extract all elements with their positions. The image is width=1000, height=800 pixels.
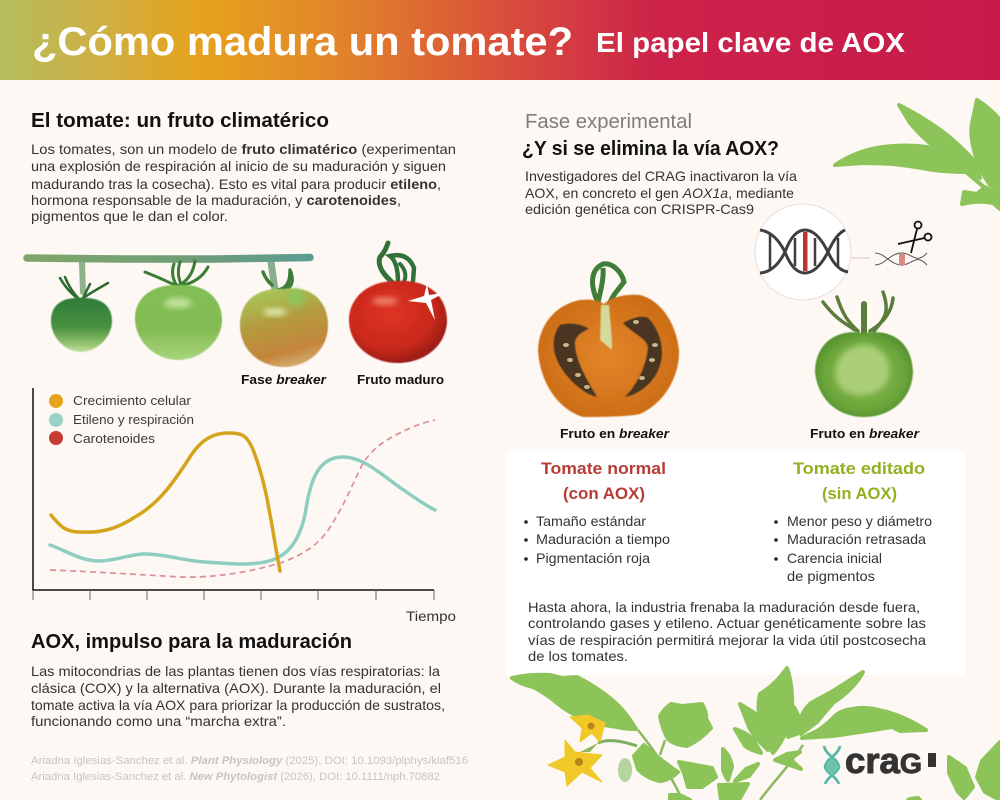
small green tomato bbox=[51, 298, 112, 352]
axes bbox=[33, 388, 434, 590]
cut tomato: normal bbox=[538, 264, 679, 417]
text block: AOX: clásica (COX) y la alternativa (AOX). Durante la maduración, el bbox=[31, 680, 441, 696]
breaker tomato bbox=[240, 288, 328, 367]
caption: edited fruit: Fruto en breaker bbox=[810, 427, 920, 441]
text block: climaterico: una explosión de respiración al inicio de su maduración y siguen bbox=[31, 158, 446, 174]
label: fase experimental: Fase experimental bbox=[525, 111, 692, 133]
subtitle: El papel clave de AOX bbox=[596, 27, 905, 58]
title: normal: (con AOX) bbox=[563, 484, 645, 503]
panel: comparison bbox=[505, 451, 965, 675]
flowers bbox=[548, 715, 605, 786]
list: edited: Maduración retrasada bbox=[787, 531, 926, 547]
stems bbox=[598, 730, 803, 800]
text block: climaterico: hormona responsable de la maduración, y carotenoides, bbox=[31, 192, 401, 208]
stem of ripe tomato bbox=[379, 243, 414, 282]
conclusion: vías de respiración permitirá mejorar la vida útil postcosecha bbox=[528, 632, 926, 648]
legend bbox=[49, 393, 194, 446]
large green tomato bbox=[135, 285, 222, 360]
text block: AOX: Las mitocondrias de las plantas tienen dos vías respiratorias: la bbox=[31, 663, 440, 679]
text block: AOX: funcionando como una “marcha extra”. bbox=[31, 713, 286, 729]
conclusion: de los tomates. bbox=[528, 648, 628, 664]
text block: CRISPR bbox=[525, 168, 797, 217]
logo icon bbox=[824, 746, 840, 784]
text block: CRISPR: AOX, en concreto el gen AOX1a, mediante bbox=[525, 185, 794, 201]
title: normal: Tomate normal bbox=[541, 459, 666, 478]
truss stem bbox=[27, 258, 310, 300]
title: normal bbox=[541, 459, 666, 503]
text block: climaterico: Los tomates, son un modelo de fruto climatérico (experimentan bbox=[31, 141, 456, 157]
list: edited bbox=[774, 513, 932, 584]
list: normal bbox=[524, 513, 670, 566]
series: carotenoides bbox=[50, 420, 435, 577]
line chart bbox=[33, 388, 435, 600]
heading: AOX: AOX, impulso para la maduración bbox=[31, 631, 352, 653]
list: edited: de pigmentos bbox=[787, 568, 875, 584]
caption: fruto maduro: Fruto maduro bbox=[357, 373, 444, 387]
list: normal: Pigmentación roja bbox=[536, 550, 650, 566]
heading: eliminar AOX: ¿Y si se elimina la vía AOX? bbox=[522, 138, 779, 160]
connector line bbox=[851, 257, 870, 259]
text block: climaterico: madurando tras la cosecha). Esto es vital para producir etileno, bbox=[31, 176, 441, 192]
leaves bbox=[512, 668, 1000, 800]
list: edited: Carencia inicial bbox=[787, 550, 882, 566]
title: edited: Tomate editado bbox=[793, 459, 925, 478]
axis label: Tiempo bbox=[406, 608, 456, 624]
conclusion: controlando gases y etileno. Actuar genéticamente sobre las bbox=[528, 615, 926, 631]
text block: climaterico: pigmentos que le dan el color. bbox=[31, 208, 228, 224]
header banner bbox=[0, 0, 1000, 80]
series: crecimiento bbox=[51, 433, 280, 571]
cut tomato: edited bbox=[815, 292, 913, 417]
title: edited bbox=[793, 459, 925, 503]
text block: climaterico bbox=[31, 141, 456, 224]
caption: fase breaker: Fase breaker bbox=[241, 373, 327, 387]
text block: CRISPR: Investigadores del CRAG inactivaron la vía bbox=[525, 168, 797, 184]
references: Ariadna Iglesias-Sanchez et al. New Phytologist (2026), DOI: 10.1111/nph.70882 bbox=[31, 771, 440, 783]
main title: ¿Cómo madura un tomate? bbox=[32, 20, 573, 64]
text block: CRISPR: edición genética con CRISPR-Cas9 bbox=[525, 201, 754, 217]
logo: CRAG bbox=[824, 740, 936, 784]
bud bbox=[618, 758, 632, 782]
icon: scissors and small DNA bbox=[875, 222, 932, 265]
title: edited: (sin AOX) bbox=[822, 484, 897, 503]
text block: AOX bbox=[31, 663, 445, 729]
list: normal: Tamaño estándar bbox=[536, 513, 646, 529]
ripe red tomato bbox=[349, 281, 447, 363]
caption: normal fruit: Fruto en breaker bbox=[560, 427, 670, 441]
references bbox=[31, 755, 468, 783]
icon: DNA magnified bbox=[755, 204, 851, 300]
heading: fruto climaterico: El tomate: un fruto climatérico bbox=[31, 110, 329, 132]
icon: top right leaves bbox=[835, 100, 1000, 209]
tomato truss with ripening stages bbox=[27, 243, 447, 367]
logo: CRAG: craG bbox=[845, 740, 922, 781]
legend: Carotenoides bbox=[73, 431, 156, 446]
text block: AOX: tomate activa la vía AOX para priorizar la producción de sustratos, bbox=[31, 697, 445, 713]
conclusion: Hasta ahora, la industria frenaba la maduración desde fuera, bbox=[528, 599, 920, 615]
series: etileno bbox=[50, 457, 435, 564]
sparkle bbox=[408, 284, 444, 320]
legend: Crecimiento celular bbox=[73, 393, 192, 408]
references: Ariadna Iglesias-Sanchez et al. Plant Physiology (2025), DOI: 10.1093/plphys/kiaf516 bbox=[31, 755, 468, 767]
list: edited: Menor peso y diámetro bbox=[787, 513, 932, 529]
conclusion bbox=[528, 599, 926, 664]
illustration: tomato plant bbox=[512, 668, 1000, 800]
list: normal: Maduración a tiempo bbox=[536, 531, 670, 547]
legend: Etileno y respiración bbox=[73, 412, 194, 427]
